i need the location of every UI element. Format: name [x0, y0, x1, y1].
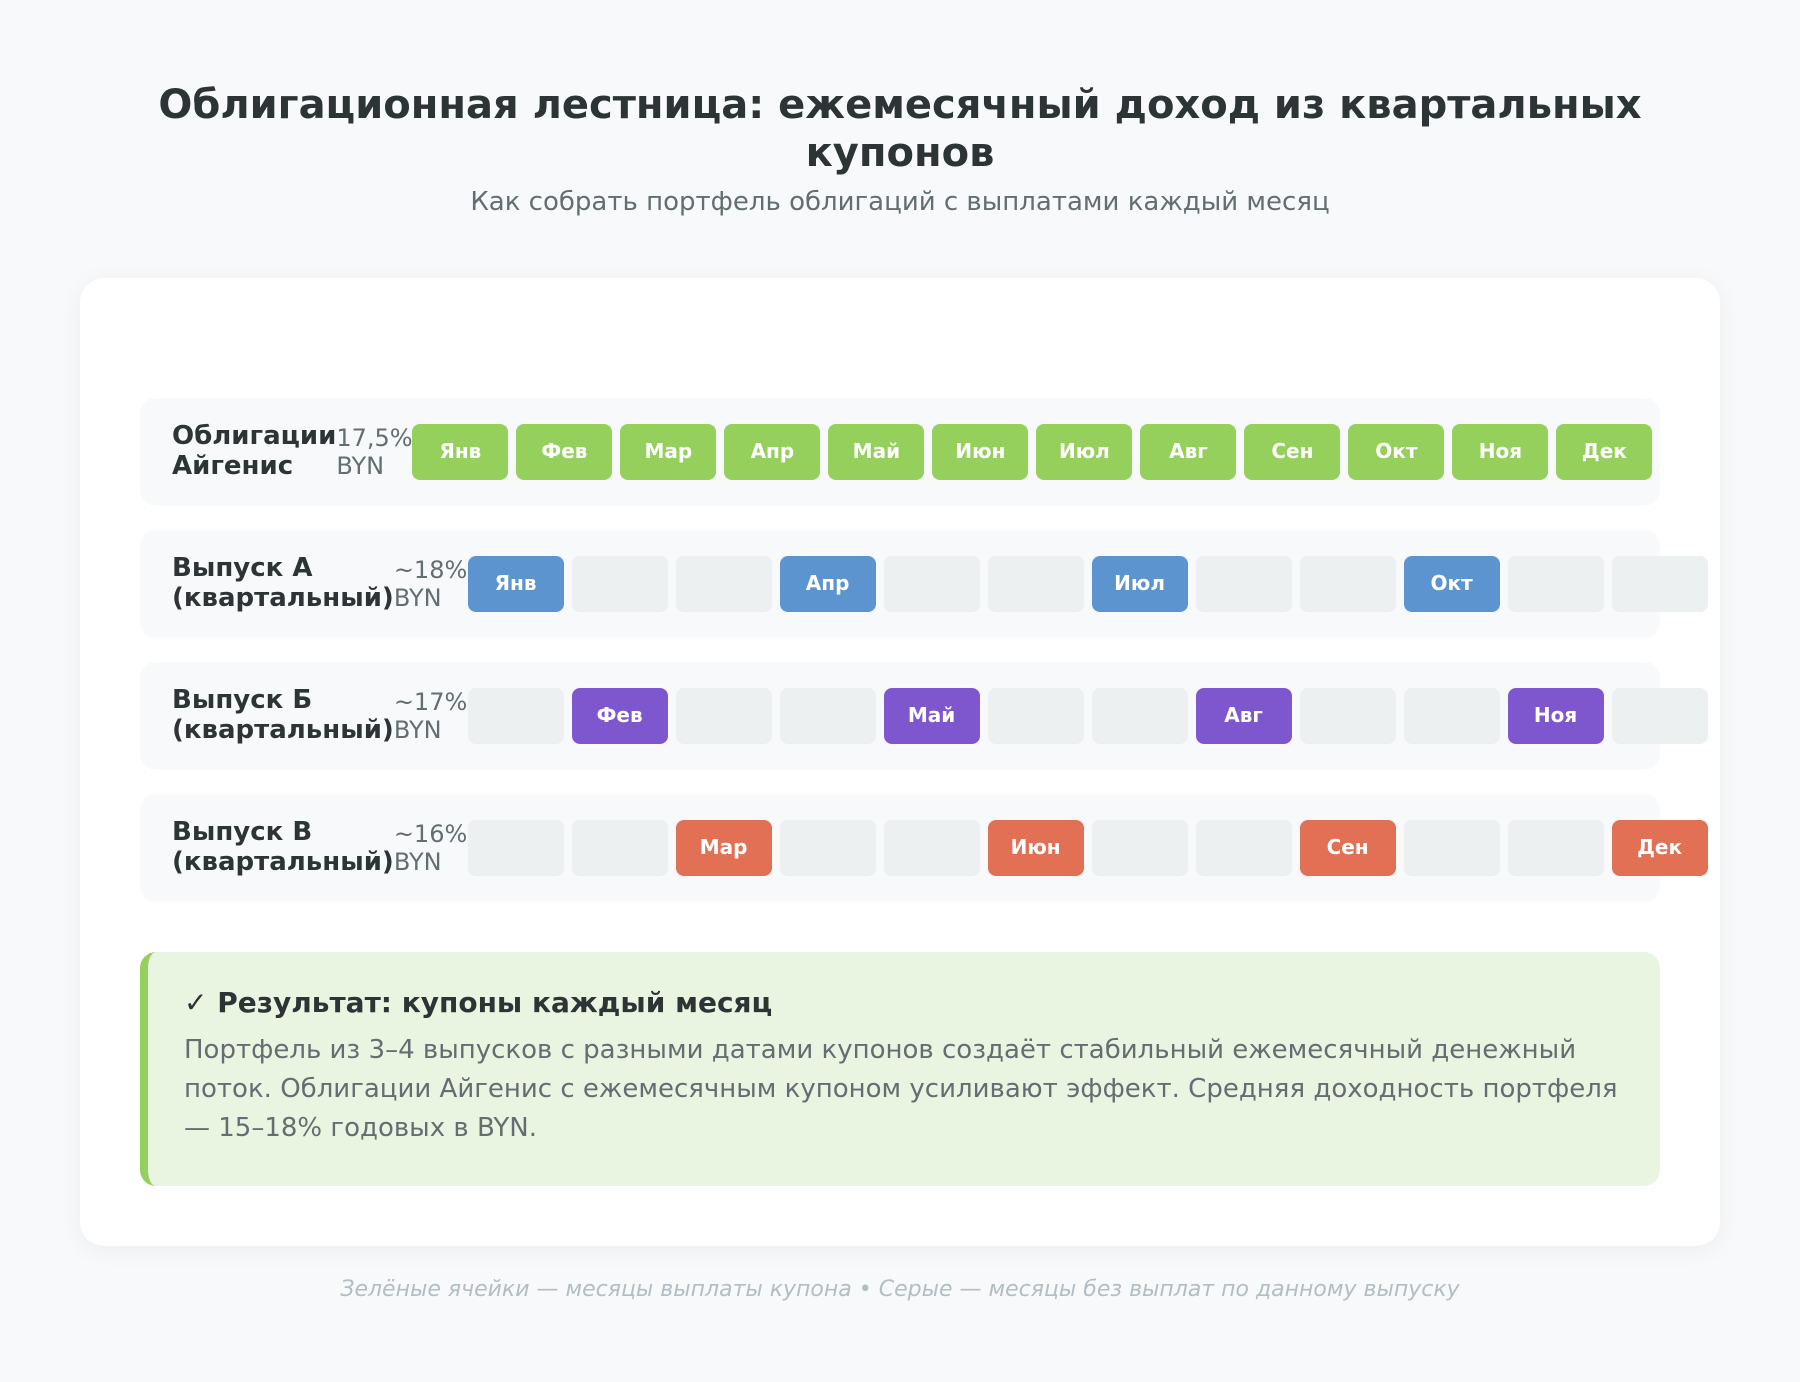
month cells: monthly coupons: Май: [853, 439, 900, 463]
month cells: monthly coupons: [412, 424, 1652, 480]
row: Выпуск Б: [140, 662, 1660, 770]
callout heading: ✓ Результат: купоны каждый месяц: [184, 986, 772, 1019]
month cells: monthly coupons: Апр: [751, 439, 794, 463]
yield value: [394, 820, 467, 876]
month cells: monthly coupons: Фев: [541, 439, 587, 463]
row label: [172, 817, 394, 877]
row label: [172, 421, 336, 481]
yield value: ~18%: [394, 556, 467, 584]
row: Облигации Айгенис: [140, 398, 1660, 506]
month cells: monthly coupons: Авг: [1169, 439, 1208, 463]
month cells: monthly coupons: Июл: [1059, 439, 1110, 463]
yield value: ~17%: [394, 688, 467, 716]
month cells: monthly coupons: Дек: [1582, 439, 1627, 463]
row: Выпуск В: [140, 794, 1660, 902]
month cells: monthly coupons: Июн: [955, 439, 1005, 463]
yield value: BYN: [394, 848, 442, 876]
row label: Выпуск Б: [172, 685, 312, 715]
yield value: [336, 424, 413, 480]
month cells: issue A coupons: Апр: [806, 571, 849, 595]
row label: [172, 553, 394, 613]
month cells: issue B coupons: [468, 688, 1708, 744]
subtitle: Как собрать портфель облигаций с выплатами каждый месяц: [470, 187, 1330, 217]
yield value: BYN: [336, 452, 384, 480]
yield value: BYN: [394, 584, 442, 612]
month cells: issue A coupons: [468, 556, 1708, 612]
month cells: issue C coupons: Июн: [1011, 835, 1061, 859]
month cells: issue C coupons: Сен: [1327, 835, 1369, 859]
month cells: issue C coupons: [468, 820, 1708, 876]
row: Выпуск А: [140, 530, 1660, 638]
yield value: BYN: [394, 716, 442, 744]
row label: Облигации: [172, 421, 336, 451]
month cells: monthly coupons: Янв: [439, 439, 481, 463]
title: Облигационная лестница: ежемесячный доход из квартальных купонов: [158, 82, 1642, 176]
row label: (квартальный): [172, 715, 394, 745]
callout text: Портфель из 3–4 выпусков с разными датами купонов создаёт стабильный ежемесячный денежный поток. Облигации Айгенис с ежемесячным купоном усиливают эффект. Средняя доходность портфеля — 15–18% годовых в BYN.: [184, 1035, 1617, 1143]
month cells: issue B coupons: Фев: [597, 703, 643, 727]
month cells: issue B coupons: Май: [908, 703, 955, 727]
yield value: 17,5%: [336, 424, 413, 452]
month cells: issue C coupons: Дек: [1637, 835, 1682, 859]
footnote: Зелёные ячейки — месяцы выплаты купона • Серые — месяцы без выплат по данному выпуску: [340, 1277, 1460, 1302]
row label: [172, 685, 394, 745]
month cells: issue C coupons: Мар: [700, 835, 747, 859]
month cells: issue A coupons: Окт: [1430, 571, 1473, 595]
panel: ladder card: [80, 278, 1720, 1246]
month cells: issue A coupons: Июл: [1114, 571, 1165, 595]
month cells: issue A coupons: Янв: [495, 571, 537, 595]
yield value: ~16%: [394, 820, 467, 848]
month cells: issue B coupons: Авг: [1224, 703, 1263, 727]
row label: (квартальный): [172, 847, 394, 877]
row label: Выпуск В: [172, 817, 312, 847]
month cells: issue B coupons: Ноя: [1534, 703, 1577, 727]
month cells: monthly coupons: Окт: [1375, 439, 1417, 463]
row label: Айгенис: [172, 451, 293, 481]
yield value: [394, 688, 467, 744]
row label: (квартальный): [172, 583, 394, 613]
month cells: monthly coupons: Ноя: [1479, 439, 1522, 463]
row label: Выпуск А: [172, 553, 312, 583]
yield value: [394, 556, 467, 612]
month cells: monthly coupons: Мар: [645, 439, 692, 463]
callout: result: [140, 952, 1660, 1186]
month cells: monthly coupons: Сен: [1271, 439, 1313, 463]
